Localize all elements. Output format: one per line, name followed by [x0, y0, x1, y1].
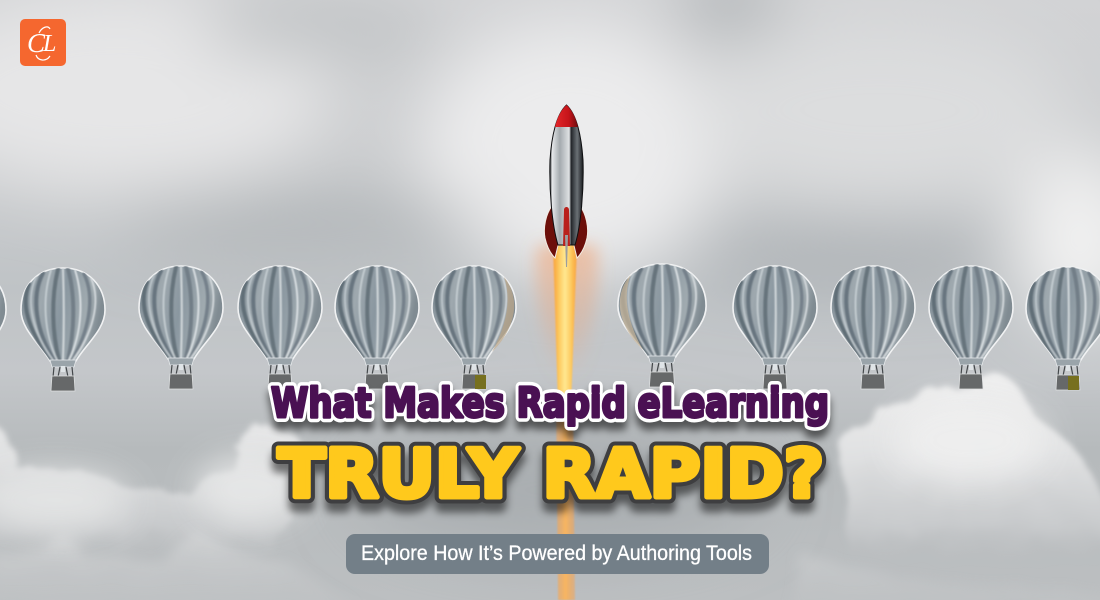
- balloon 7: [733, 266, 817, 389]
- balloon 8: [831, 266, 915, 389]
- balloon 3: [238, 266, 322, 389]
- title line 2: TRULY RAPID?: [278, 444, 824, 522]
- subtitle pill: Explore How It’s Powered by Authoring Tools: [361, 542, 752, 565]
- balloon 9: [929, 266, 1013, 389]
- logo badge: [20, 19, 66, 66]
- rocket exhaust flame: [536, 245, 598, 600]
- title line 2: TRULY RAPID?: [278, 435, 824, 513]
- balloon 6, lit by flame: [618, 264, 706, 387]
- logo badge: L: [42, 31, 56, 57]
- icon: rocket: [544, 105, 588, 267]
- balloon 10: [1026, 267, 1100, 390]
- title line 1: What Makes Rapid eLearning: [271, 379, 829, 427]
- balloon 4: [335, 266, 419, 389]
- title line 1: What Makes Rapid eLearning: [271, 379, 829, 427]
- logo badge: C: [27, 28, 46, 58]
- balloon 2: [139, 266, 223, 389]
- title line 1: What Makes Rapid eLearning: [271, 387, 829, 435]
- balloon 5, lit by flame: [432, 266, 516, 389]
- subtitle pill: [346, 534, 769, 574]
- balloon 1: [21, 268, 105, 391]
- title line 2: TRULY RAPID?: [278, 435, 824, 513]
- clouds: lower left and right: [0, 375, 1100, 600]
- partial balloon at left edge: [0, 268, 6, 391]
